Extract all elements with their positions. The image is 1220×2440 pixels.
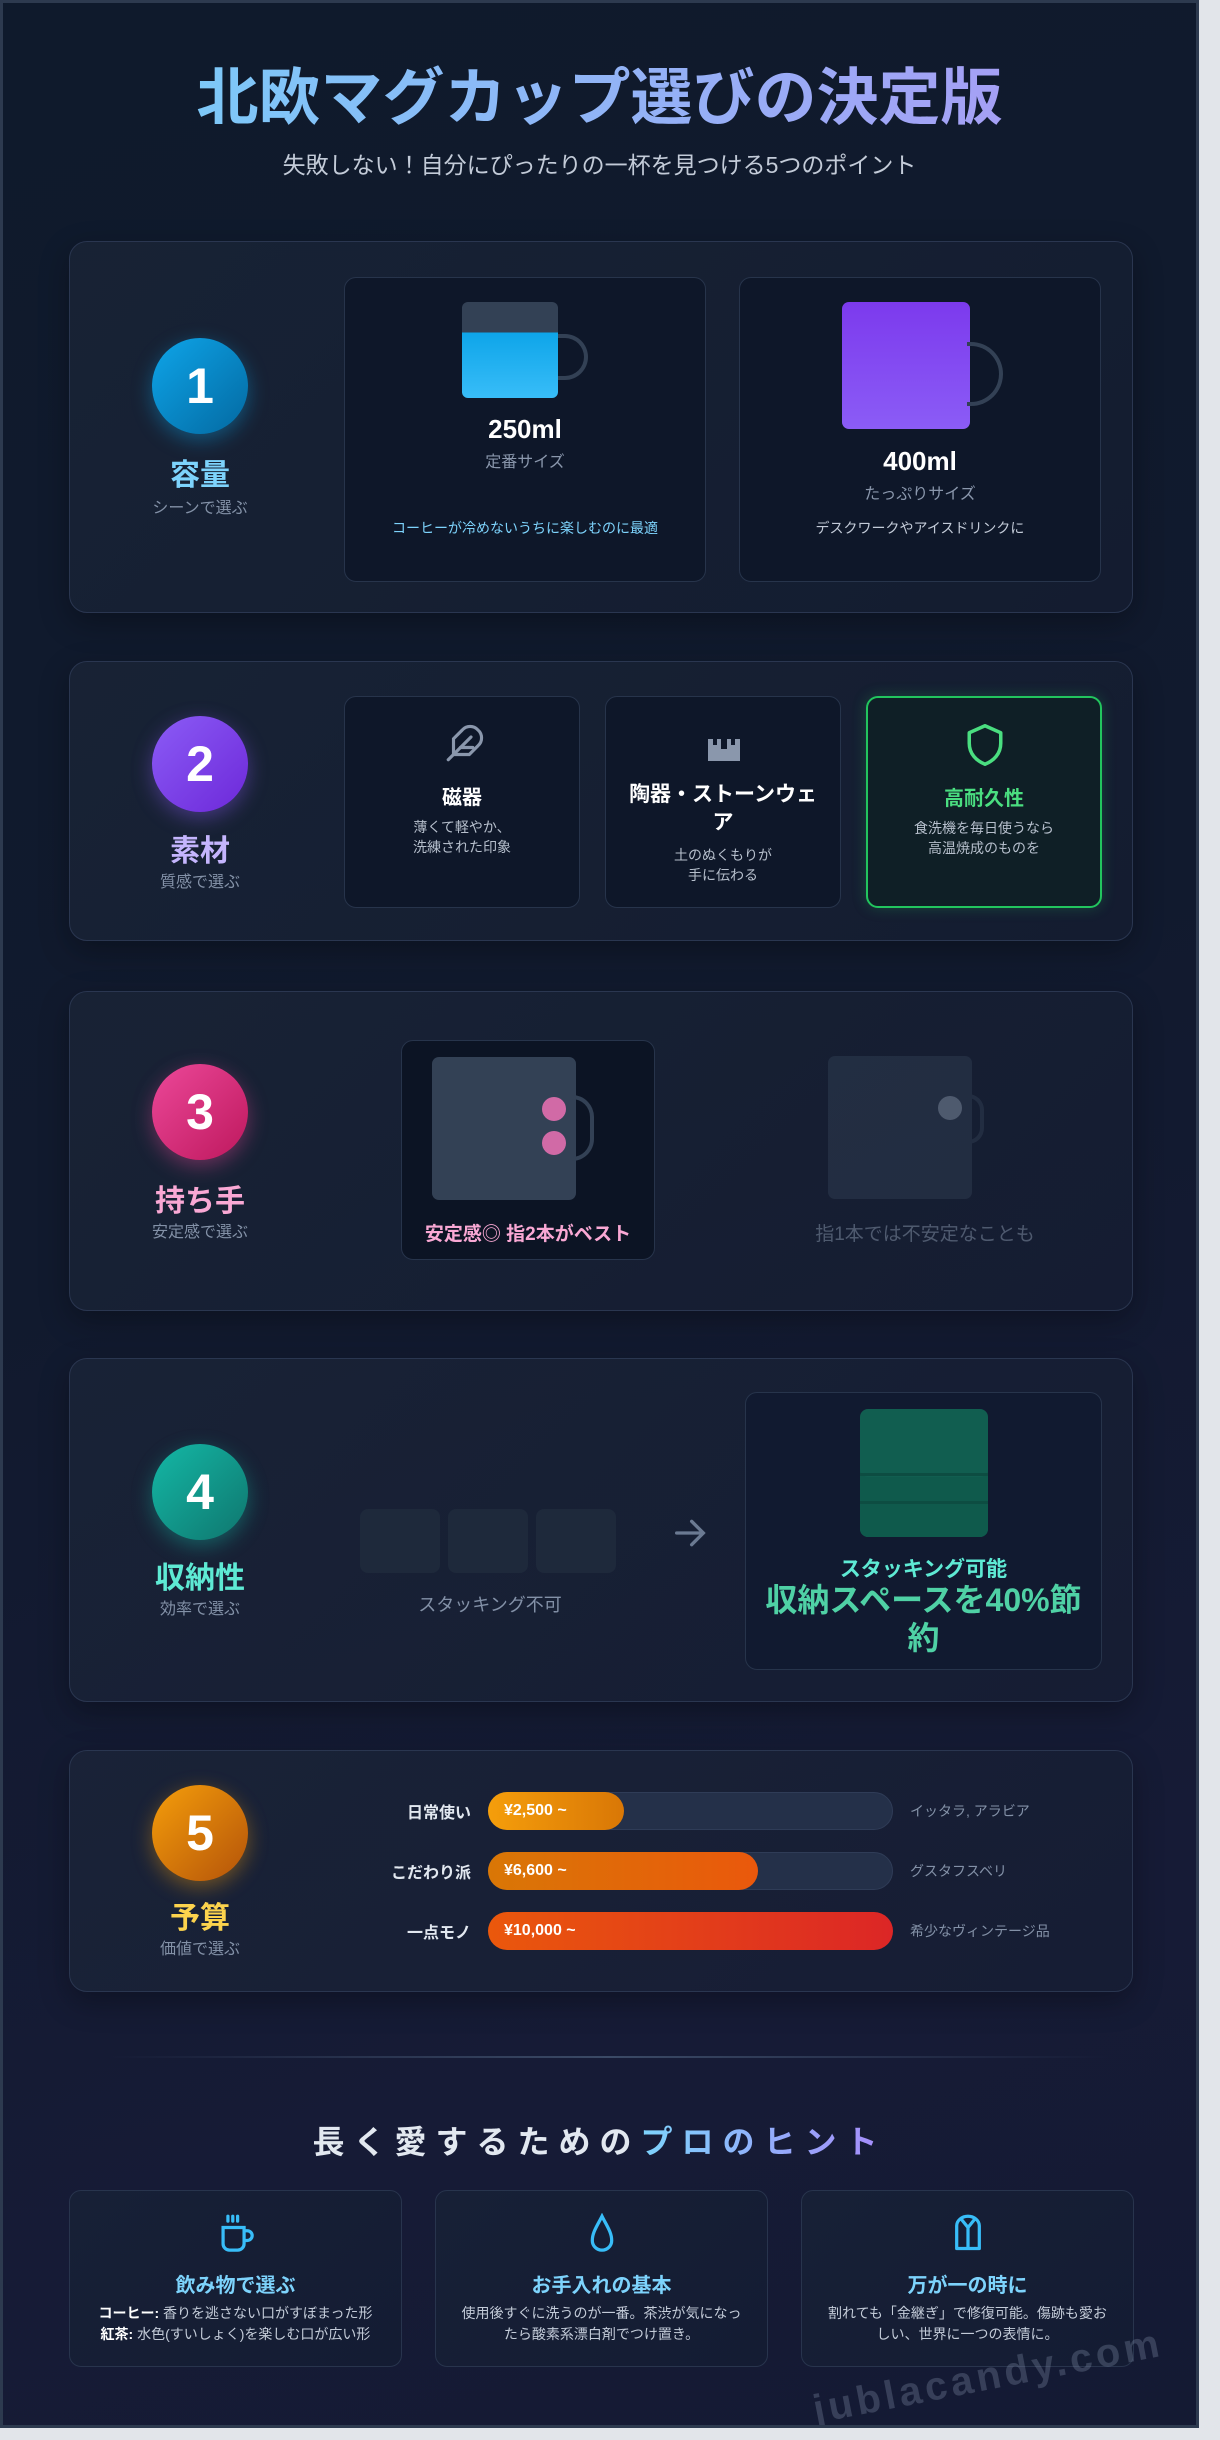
text: desc: 薄くて軽やか、 xyxy=(413,819,511,835)
badge 1 xyxy=(152,338,248,434)
sub: 安定感で選ぶ xyxy=(152,1224,248,1241)
icon: big mug xyxy=(842,302,1003,429)
text: desc: 洗練された印象 xyxy=(413,839,511,855)
text: best: 安定感◎ 指2本がベスト xyxy=(425,1224,631,1245)
not-stackable group xyxy=(360,1509,616,1615)
card: 高耐久性 xyxy=(866,696,1102,908)
icon: feather xyxy=(446,724,484,762)
arrow xyxy=(675,1520,706,1546)
bar: 一点モノ xyxy=(407,1912,1050,1950)
text: 陶器: 陶器・ストーンウェア xyxy=(629,783,817,834)
text: desc: コーヒー: 香りを逃さない口がすぼまった形 xyxy=(98,2305,372,2321)
sub: 効率で選ぶ xyxy=(160,1601,240,1618)
badge 3: 3 xyxy=(186,1084,214,1140)
subtitle: 失敗しない！自分にぴったりの一杯を見つける5つのポイント xyxy=(283,152,916,178)
icon: small mug xyxy=(462,302,588,398)
panel: 5 budget xyxy=(69,1750,1133,1992)
sub: 質感で選ぶ xyxy=(160,874,240,891)
badge 4: 4 xyxy=(186,1464,214,1520)
text: スタッキング可能: スタッキング可能 xyxy=(840,1558,1007,1581)
card: 陶器 xyxy=(605,696,841,908)
bar: 日常使い xyxy=(407,1792,1030,1830)
hint card: drinks xyxy=(69,2190,402,2367)
card: stackable xyxy=(745,1392,1102,1670)
text: desc: 割れても「金継ぎ」で修復可能。傷跡も愛おしい、世界に一つの表情に。 xyxy=(828,2305,1107,2342)
bar: 日常使い: 日常使い xyxy=(407,1805,471,1822)
bar: 日常使い: ¥2,500 ~ xyxy=(504,1802,567,1819)
icon: pots xyxy=(708,739,740,761)
card: 400ml xyxy=(739,277,1101,582)
bar: こだわり派: ¥6,600 ~ xyxy=(504,1862,567,1879)
text: title: 飲み物で選ぶ xyxy=(176,2275,296,2297)
text: desc xyxy=(413,819,511,855)
heading: 容量: 容量 xyxy=(170,459,230,492)
text: 高耐久性: 高耐久性 xyxy=(944,788,1024,810)
text: desc xyxy=(674,847,772,883)
bar: こだわり派: グスタフスベリ xyxy=(910,1863,1007,1879)
card: 250ml xyxy=(344,277,706,582)
text: desc: 手に伝わる xyxy=(688,867,758,883)
panel: 2 material xyxy=(69,661,1133,941)
heading: 持ち手: 持ち手 xyxy=(155,1185,245,1218)
hint card: care xyxy=(435,2190,768,2367)
text: 250ml: 250ml xyxy=(488,414,562,444)
bar: 一点モノ: 一点モノ xyxy=(407,1925,471,1942)
icon: mug with two fingers xyxy=(432,1057,594,1200)
heading: 予算: 予算 xyxy=(170,1902,230,1935)
text: 40%: 収納スペースを40%節約 xyxy=(765,1582,1082,1656)
text: 定番サイズ: 定番サイズ xyxy=(485,454,565,471)
sub: シーンで選ぶ: シーンで選ぶ xyxy=(152,500,248,517)
icon: kintsugi xyxy=(955,2214,981,2250)
panel: 3 handle xyxy=(69,991,1133,1311)
bar: 一点モノ: ¥10,000 ~ xyxy=(504,1922,576,1939)
panel: 1 capacity xyxy=(69,241,1133,613)
badge 1: 1 xyxy=(186,358,214,414)
text: desc: 土のぬくもりが xyxy=(674,847,772,863)
title: 北欧マグカップ選びの決定版 xyxy=(196,64,1002,133)
panel: 4 storage xyxy=(69,1358,1133,1702)
badge 3 xyxy=(152,1064,248,1160)
heading: 素材: 素材 xyxy=(170,835,230,868)
heading: 収納性: 収納性 xyxy=(155,1562,245,1595)
card: two-finger xyxy=(401,1040,655,1260)
text: desc: 食洗機を毎日使うなら xyxy=(914,820,1054,836)
text: desc xyxy=(98,2305,372,2342)
text: たっぷりサイズ: たっぷりサイズ xyxy=(864,486,976,503)
text: title: お手入れの基本 xyxy=(532,2275,672,2297)
text: desc xyxy=(914,820,1054,856)
badge 2 xyxy=(152,716,248,812)
text: unstable: 指1本では不安定なことも xyxy=(815,1224,1035,1245)
text: note: コーヒーが冷めないうちに楽しむのに最適 xyxy=(392,520,658,536)
badge 5: 5 xyxy=(186,1805,214,1861)
text: 磁器: 磁器 xyxy=(442,787,482,809)
badge 2: 2 xyxy=(186,736,214,792)
card: 磁器 xyxy=(344,696,580,908)
faded: one-finger xyxy=(815,1056,1035,1245)
heading: hints: 長く愛するためのプロのヒント xyxy=(312,2124,887,2160)
text: title: 万が一の時に xyxy=(908,2275,1028,2297)
text: スタッキング不可 xyxy=(418,1595,562,1615)
text: desc: 高温焼成のものを xyxy=(928,840,1040,856)
icon: shield xyxy=(968,724,1002,766)
bar: 日常使い: イッタラ, アラビア xyxy=(910,1803,1030,1819)
text: desc: 使用後すぐに洗うのが一番。茶渋が気になったら酸素系漂白剤でつけ置き。 xyxy=(462,2305,742,2342)
sub: 価値で選ぶ xyxy=(160,1941,240,1958)
hint card: repair xyxy=(801,2190,1134,2367)
icon: stacked mugs xyxy=(860,1409,988,1537)
bar chart xyxy=(391,1792,1050,1950)
icon: cup xyxy=(221,2214,254,2252)
bar: こだわり派 xyxy=(391,1852,1007,1890)
icon: drop xyxy=(590,2213,614,2252)
badge 5 xyxy=(152,1785,248,1881)
text: 400ml: 400ml xyxy=(883,446,957,476)
text: desc: 紅茶: 水色(すいしょく)を楽しむ口が広い形 xyxy=(101,2326,370,2342)
bar: こだわり派: こだわり派 xyxy=(391,1865,471,1882)
bar: 一点モノ: 希少なヴィンテージ品 xyxy=(910,1923,1050,1939)
badge 4 xyxy=(152,1444,248,1540)
text: desc: デスクワークやアイスドリンクに xyxy=(816,520,1024,536)
